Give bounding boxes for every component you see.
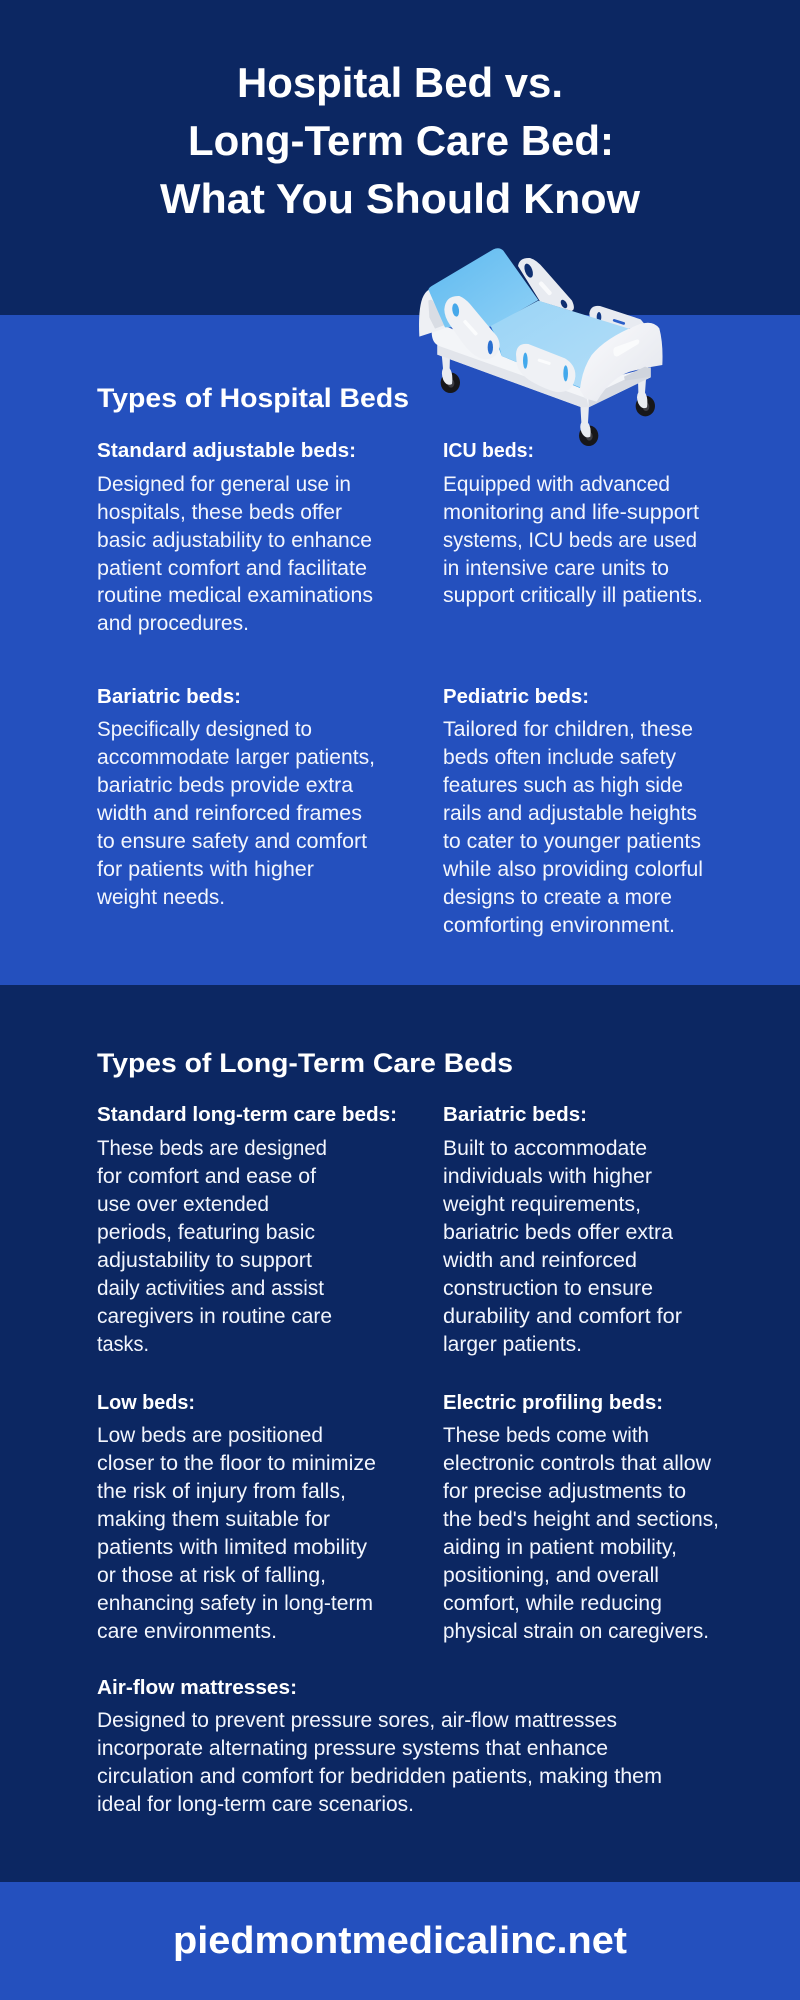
mattress flat xyxy=(491,301,633,387)
back rail, foot side xyxy=(589,306,645,331)
text block: bariatric beds: Bariatric beds: xyxy=(443,1104,587,1126)
text block: bariatric beds: Bariatric beds: xyxy=(97,686,241,708)
text block: standard long-term care beds: use over extended xyxy=(97,1193,269,1216)
text block: air-flow mattresses: Designed to prevent pressure sores, air-flow mattresses xyxy=(97,1709,617,1732)
text block: electric profiling beds: comfort, while reducing xyxy=(443,1592,662,1615)
front rail, centre xyxy=(516,344,575,392)
title: Hospital Bed vs. xyxy=(237,59,563,106)
text block: bariatric beds: weight needs. xyxy=(96,886,225,909)
text block: bariatric beds: Built to accommodate xyxy=(443,1137,647,1160)
text block: standard long-term care beds: tasks. xyxy=(97,1333,149,1356)
text block: standard long-term care beds: Standard long-term care beds: xyxy=(97,1104,397,1126)
text block: bariatric beds: width and reinforced frames xyxy=(96,802,362,825)
text block: air-flow mattresses xyxy=(97,1677,662,1816)
text block: low beds: the risk of injury from falls, xyxy=(97,1480,346,1503)
text block: bariatric beds: construction to ensure xyxy=(443,1277,653,1300)
icon: hospital bed xyxy=(419,248,663,446)
text block: standard adjustable beds: patient comfort and facilitate xyxy=(97,557,367,580)
text block: electric profiling beds: positioning, and overall xyxy=(443,1564,659,1587)
back rail, head side xyxy=(518,258,574,311)
text block: bariatric beds: to ensure safety and comfort xyxy=(97,830,367,853)
text block: standard long-term care beds: adjustability to support xyxy=(97,1249,312,1272)
text block: pediatric beds xyxy=(442,686,703,937)
text block: bariatric beds: weight requirements, xyxy=(442,1193,641,1216)
text block: low beds: enhancing safety in long-term xyxy=(97,1592,373,1615)
footboard xyxy=(580,323,663,402)
panel: title header xyxy=(0,0,800,315)
front rail, head side xyxy=(444,296,500,359)
text block: electric profiling beds: electronic controls that allow xyxy=(443,1452,712,1475)
text block: ICU beds: ICU beds: xyxy=(443,440,534,462)
text block: standard long-term care beds: daily activities and assist xyxy=(97,1277,324,1300)
heading: types of hospital beds: Types of Hospital Beds xyxy=(97,383,409,413)
text block: bariatric beds: larger patients. xyxy=(443,1333,582,1356)
text block: bariatric beds xyxy=(96,686,375,909)
text block: standard long-term care beds: caregivers in routine care xyxy=(97,1305,332,1328)
text block: standard adjustable beds: routine medical examinations xyxy=(97,584,373,607)
text block: standard adjustable beds xyxy=(97,440,373,635)
text block: low beds: or those at risk of falling, xyxy=(97,1564,326,1587)
heading: types of long-term care beds: Types of Long-Term Care Beds xyxy=(97,1048,513,1078)
back-right leg and wheel xyxy=(636,379,655,416)
text block: low beds xyxy=(97,1392,376,1643)
lower frame and deck xyxy=(432,326,651,407)
text block: ICU beds: in intensive care units to xyxy=(443,557,669,580)
text block: bariatric beds: for patients with higher xyxy=(97,858,314,881)
mattress side xyxy=(491,326,583,388)
text block: electric profiling beds: These beds come with xyxy=(443,1424,649,1447)
text block: bariatric beds: individuals with higher xyxy=(443,1165,652,1188)
text block: standard long-term care beds: periods, featuring basic xyxy=(97,1221,315,1244)
text block: electric profiling beds: the bed's height and sections, xyxy=(443,1508,719,1531)
headboard xyxy=(419,289,446,337)
text block: pediatric beds: to cater to younger patients xyxy=(443,830,701,853)
back-left leg and wheel xyxy=(441,354,460,393)
text block: low beds: closer to the floor to minimize xyxy=(97,1452,376,1475)
text block: standard adjustable beds: and procedures. xyxy=(97,612,249,635)
text block: air-flow mattresses: circulation and comfort for bedridden patients, making them xyxy=(97,1765,662,1788)
mattress raised back xyxy=(428,248,538,327)
front leg and wheel xyxy=(579,405,598,446)
text block: low beds: patients with limited mobility xyxy=(97,1536,368,1559)
text block: standard long-term care beds: for comfort and ease of xyxy=(97,1165,316,1188)
text block: pediatric beds: comforting environment. xyxy=(443,914,675,937)
title: Long-Term Care Bed: xyxy=(188,117,614,164)
text block: standard adjustable beds: Designed for general use in xyxy=(97,473,351,496)
panel: types of long-term care beds xyxy=(0,985,800,1882)
title: What You Should Know xyxy=(160,175,640,222)
text block: standard long-term care beds xyxy=(97,1104,397,1356)
text block: pediatric beds: Tailored for children, these xyxy=(443,718,693,741)
text block: bariatric beds: accommodate larger patients, xyxy=(97,746,375,769)
text block: bariatric beds: width and reinforced xyxy=(442,1249,637,1272)
text block: low beds: care environments. xyxy=(97,1620,277,1643)
footer website url: piedmontmedicalinc.net xyxy=(173,1920,627,1962)
text block: electric profiling beds: Electric profiling beds: xyxy=(443,1392,663,1414)
text block: air-flow mattresses: ideal for long-term care scenarios. xyxy=(97,1793,414,1816)
text block: electric profiling beds xyxy=(443,1392,719,1643)
text block: bariatric beds: Specifically designed to xyxy=(97,718,312,741)
text block: electric profiling beds: for precise adjustments to xyxy=(443,1480,686,1503)
text block: pediatric beds: beds often include safety xyxy=(443,746,676,769)
text block: electric profiling beds: physical strain on caregivers. xyxy=(443,1620,709,1643)
title xyxy=(160,59,640,222)
text block: ICU beds xyxy=(443,440,703,607)
text block: standard long-term care beds: These beds are designed xyxy=(97,1137,327,1160)
text block: low beds: Low beds are positioned xyxy=(97,1424,323,1447)
text block: pediatric beds: designs to create a more xyxy=(443,886,672,909)
panel: footer xyxy=(0,1882,800,2000)
text block: air-flow mattresses: incorporate alternating pressure systems that enhance xyxy=(97,1737,608,1760)
text block: bariatric beds xyxy=(442,1104,682,1356)
text block: low beds: making them suitable for xyxy=(97,1508,330,1531)
text block: ICU beds: systems, ICU beds are used xyxy=(443,529,697,552)
text block: bariatric beds: durability and comfort for xyxy=(443,1305,682,1328)
text block: pediatric beds: while also providing colorful xyxy=(442,858,703,881)
text block: ICU beds: support critically ill patients. xyxy=(443,584,703,607)
text block: pediatric beds: rails and adjustable heights xyxy=(443,802,697,825)
text block: low beds: Low beds: xyxy=(97,1392,195,1414)
text block: ICU beds: monitoring and life-support xyxy=(443,501,699,524)
text block: electric profiling beds: aiding in patient mobility, xyxy=(443,1536,677,1559)
panel: types of hospital beds xyxy=(0,315,800,985)
text block: bariatric beds: bariatric beds offer extra xyxy=(443,1221,673,1244)
text block: ICU beds: Equipped with advanced xyxy=(443,473,670,496)
text block: bariatric beds: bariatric beds provide extra xyxy=(97,774,353,797)
text block: pediatric beds: Pediatric beds: xyxy=(443,686,589,708)
text block: standard adjustable beds: basic adjustability to enhance xyxy=(97,529,372,552)
text block: air-flow mattresses: Air-flow mattresses: xyxy=(97,1677,297,1699)
text block: pediatric beds: features such as high side xyxy=(443,774,683,797)
text block: standard adjustable beds: hospitals, these beds offer xyxy=(97,501,342,524)
text block: standard adjustable beds: Standard adjustable beds: xyxy=(97,440,356,462)
